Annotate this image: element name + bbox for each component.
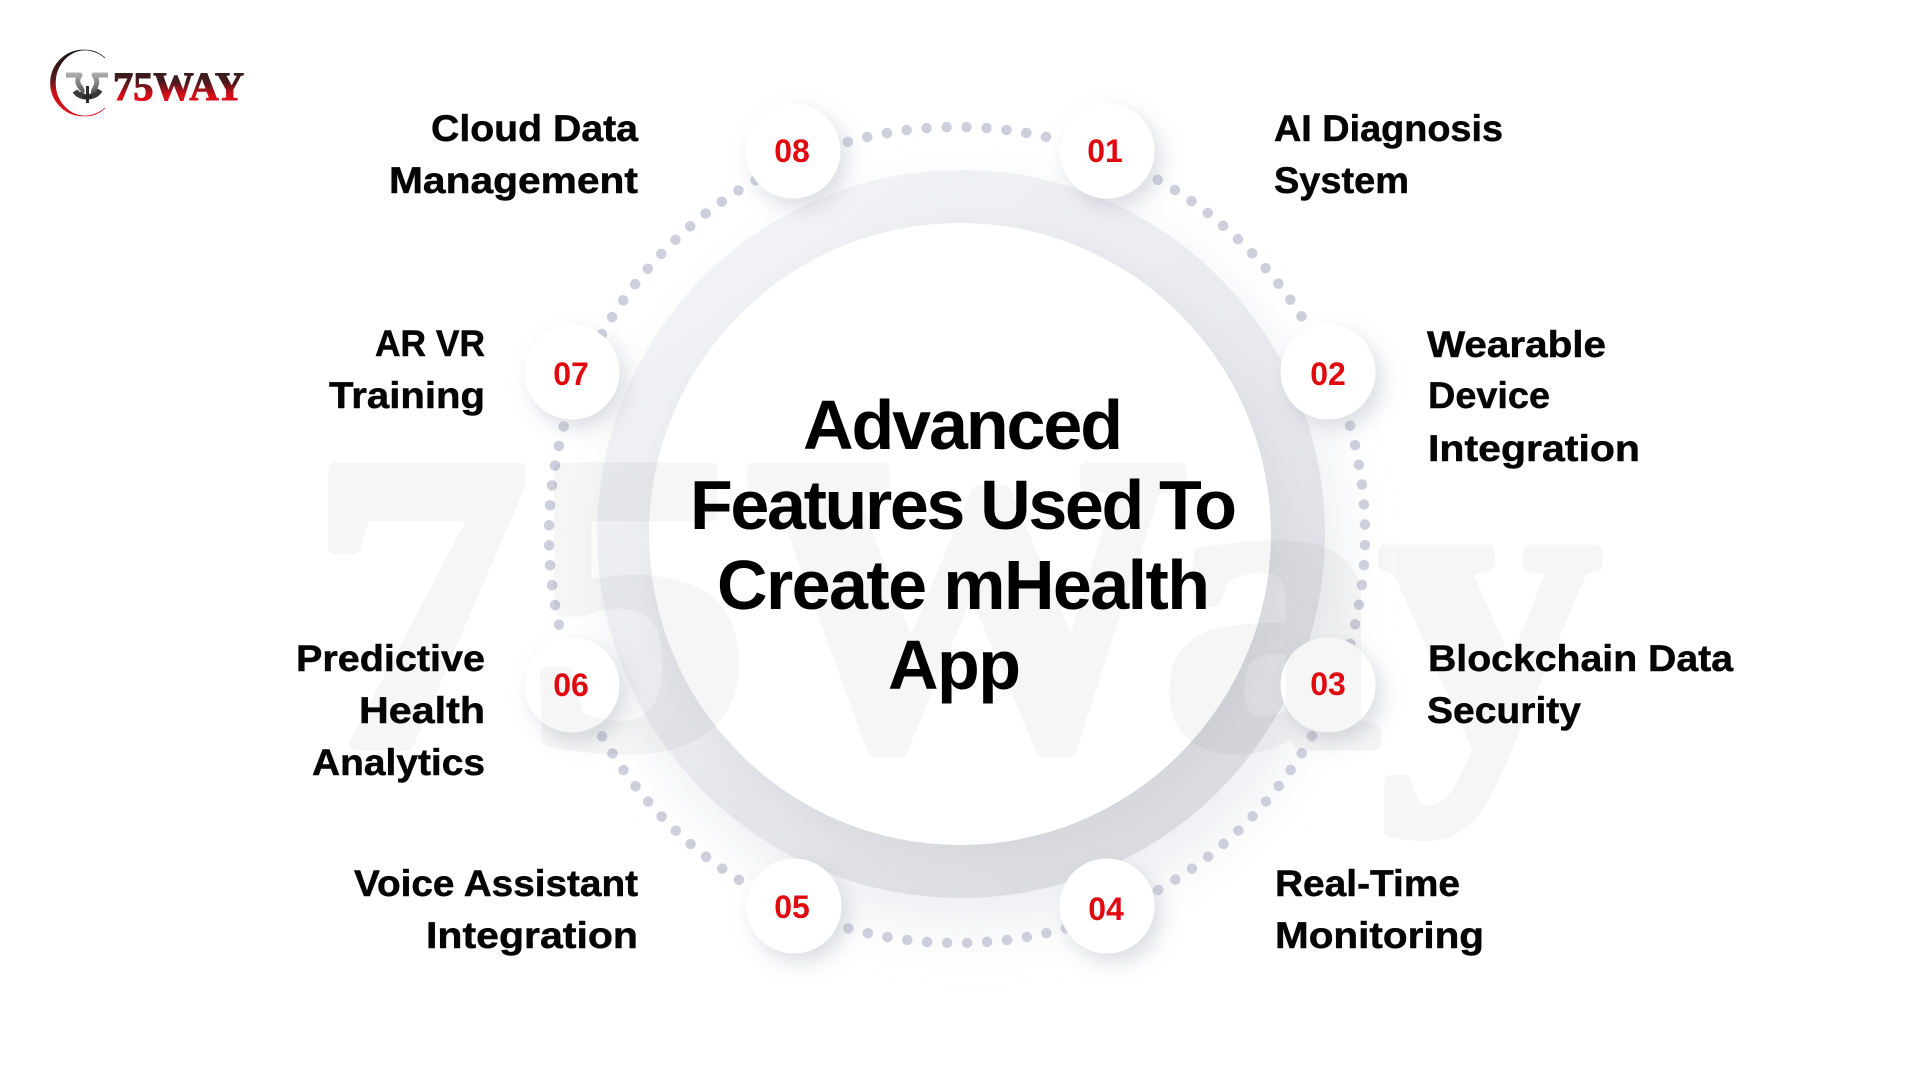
ring outer soft shadow: [611, 198, 1339, 926]
label: AR VR Training: AR VR: [375, 323, 485, 364]
badge 05: [746, 858, 842, 954]
label: Voice Assistant Integration: Voice Assistant: [354, 863, 638, 904]
label: Real-Time Monitoring: Monitoring: [1275, 915, 1484, 956]
number 04: 04: [1088, 891, 1124, 927]
label: AI Diagnosis System: AI Diagnosis: [1274, 108, 1503, 149]
number 05: 05: [774, 889, 810, 925]
number 03: 03: [1310, 666, 1346, 702]
badge 03: [1280, 638, 1376, 732]
step badges: [524, 104, 1376, 954]
label: Cloud Data Management: [389, 108, 638, 201]
title: App: [888, 626, 1021, 704]
badge 01: [1060, 104, 1154, 198]
number 06: 06: [553, 667, 589, 703]
title: [690, 386, 1237, 704]
number 08: 08: [774, 133, 810, 169]
label: Predictive Health Analytics: Predictive: [296, 638, 485, 679]
label: AR VR Training: Training: [329, 375, 485, 416]
badge 06: [524, 638, 620, 732]
label: Blockchain Data Security: [1427, 638, 1733, 731]
logo trident icon: [66, 75, 108, 103]
logo: [50, 50, 244, 116]
title: Advanced: [803, 386, 1123, 464]
dotted orbit ring: [549, 127, 1365, 943]
logo arc: [50, 50, 105, 116]
label: AI Diagnosis System: [1274, 108, 1503, 201]
number 01: 01: [1087, 133, 1123, 169]
badge 04: [1060, 858, 1154, 954]
title: Features Used To: [690, 466, 1237, 544]
central ring with white disc: [597, 170, 1325, 898]
label: AI Diagnosis System: System: [1274, 160, 1409, 201]
label: Wearable Device Integration: [1427, 324, 1640, 469]
label: Cloud Data Management: Management: [389, 160, 638, 201]
label: Wearable Device Integration: Device: [1428, 375, 1550, 416]
label: Voice Assistant Integration: [354, 863, 638, 956]
label: Predictive Health Analytics: [296, 638, 485, 783]
watermark 75Way: 75Way: [310, 370, 1600, 836]
label: Predictive Health Analytics: Health: [359, 690, 485, 731]
label: Wearable Device Integration: Integration: [1428, 428, 1640, 469]
label: Wearable Device Integration: Wearable: [1427, 324, 1606, 365]
label: Real-Time Monitoring: Real-Time: [1275, 863, 1460, 904]
label: Voice Assistant Integration: Integration: [426, 915, 638, 956]
label: Blockchain Data Security: Security: [1427, 690, 1581, 731]
label: Real-Time Monitoring: [1275, 863, 1484, 956]
label: Predictive Health Analytics: Analytics: [312, 742, 485, 783]
title: Create mHealth: [717, 546, 1210, 624]
badge 08: [746, 104, 840, 198]
label: Blockchain Data Security: Blockchain Data: [1428, 638, 1733, 679]
badge 02: [1280, 324, 1376, 420]
number 07: 07: [553, 356, 589, 392]
infographic canvas: [50, 50, 1734, 969]
label: AR VR Training: [329, 323, 485, 416]
label: Cloud Data Management: Cloud Data: [431, 108, 638, 149]
badge 07: [524, 324, 620, 420]
logo wordmark: 75WAY: [113, 64, 244, 109]
number 02: 02: [1310, 356, 1346, 392]
